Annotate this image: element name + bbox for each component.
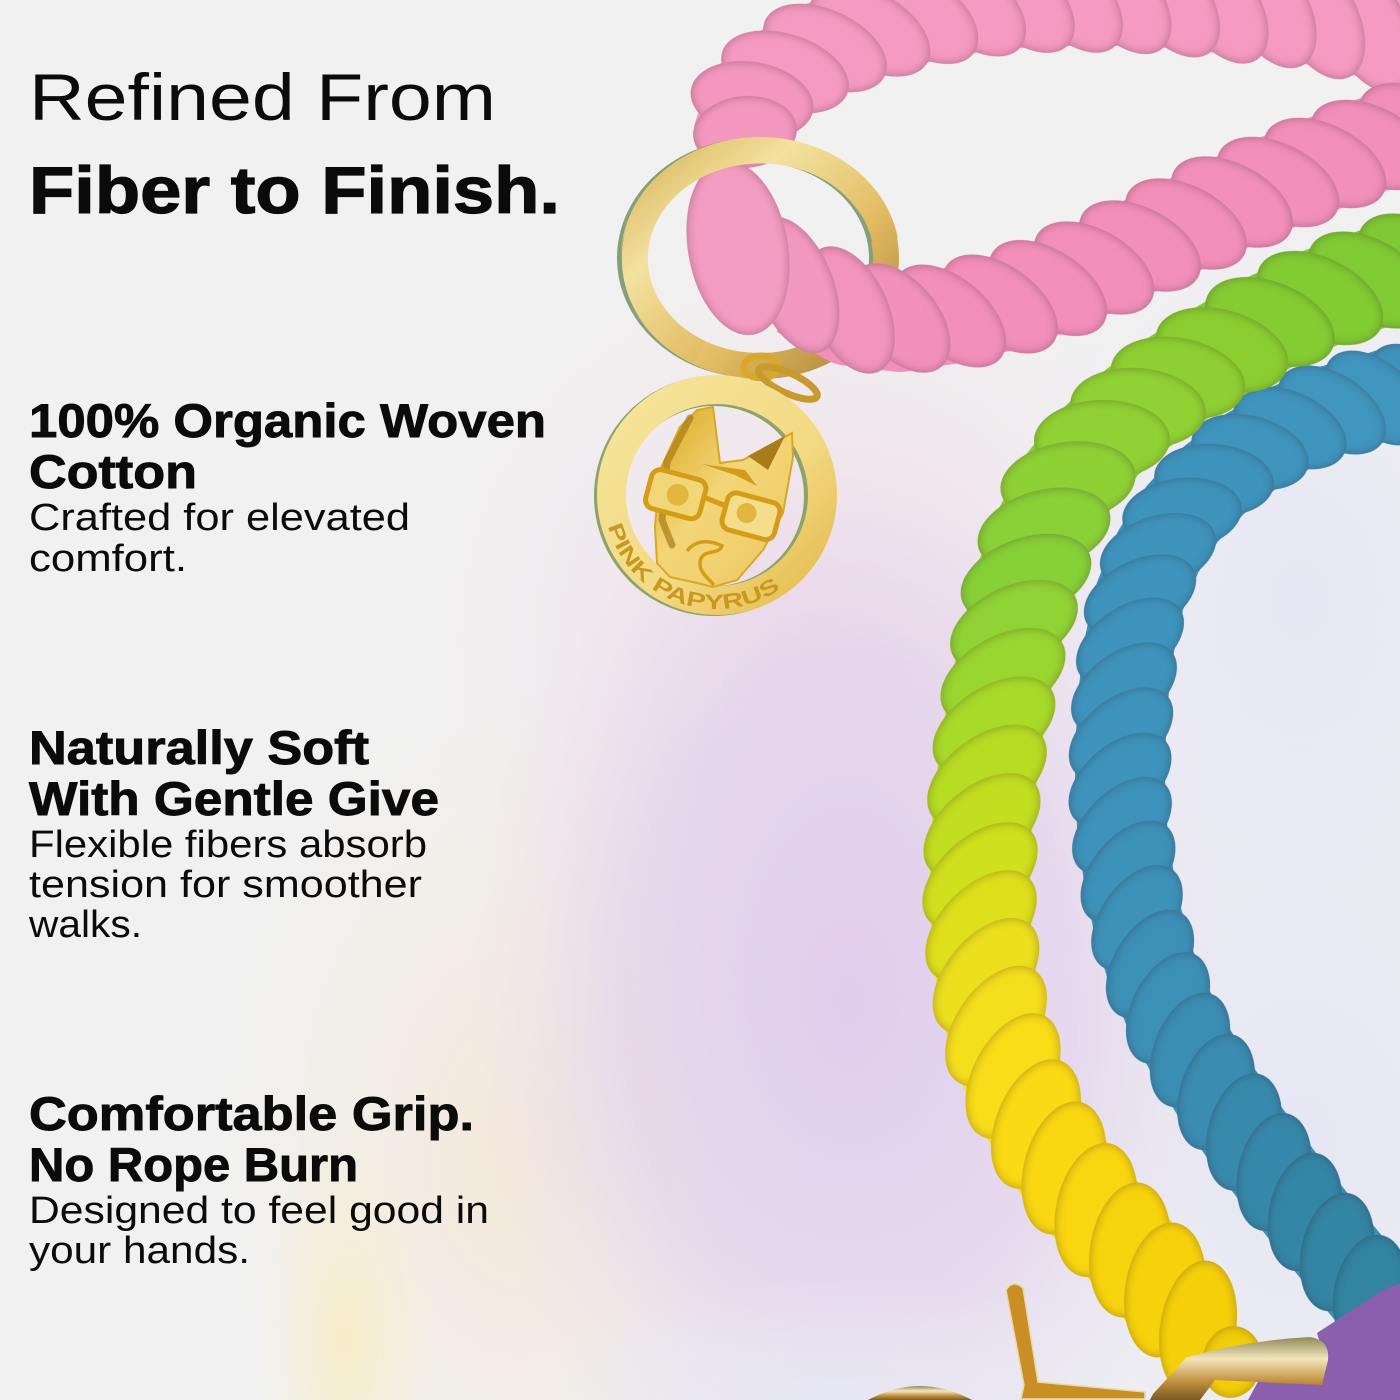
- text block: comfortable grip: Designed to feel good in: [29, 1190, 489, 1232]
- purple webbing: [1248, 1283, 1400, 1400]
- text block: naturally soft: walks.: [28, 904, 142, 946]
- tag engraved text: PINK PAPYRUS: [608, 523, 778, 610]
- buckle pin: [1006, 1284, 1145, 1399]
- rope: green to yellow strand: [902, 193, 1400, 1400]
- text block: comfortable grip: [29, 1087, 489, 1272]
- text block: naturally soft: With Gentle Give: [29, 772, 439, 825]
- text block: organic cotton: comfort.: [29, 538, 187, 580]
- gold buckle hardware: [868, 1284, 1328, 1400]
- tag bail ring: [744, 356, 821, 406]
- title: Fiber to Finish.: [29, 153, 560, 227]
- title: [29, 60, 560, 227]
- buckle dome: [868, 1386, 972, 1400]
- rope: pink lower strand and knot: [673, 64, 1400, 391]
- text block: comfortable grip: your hands.: [29, 1230, 250, 1272]
- tag disc: [609, 390, 822, 601]
- gold ring front: [624, 150, 885, 355]
- rope: pink upper strand: [684, 0, 1400, 172]
- text block: organic cotton: [29, 394, 546, 580]
- text block: naturally soft: [28, 721, 439, 946]
- title: Refined From: [29, 60, 496, 134]
- text block: comfortable grip: No Rope Burn: [29, 1138, 358, 1191]
- text block: naturally soft: tension for smoother: [29, 864, 422, 906]
- text block: organic cotton: Cotton: [29, 445, 197, 498]
- text block: naturally soft: Naturally Soft: [29, 721, 369, 774]
- buckle bar: [1150, 1337, 1328, 1400]
- text block: comfortable grip: Comfortable Grip.: [29, 1087, 474, 1140]
- text block: naturally soft: Flexible fibers absorb: [29, 824, 427, 866]
- dog head: [643, 407, 793, 587]
- text block: organic cotton: Crafted for elevated: [29, 497, 410, 539]
- rope: blue strand: [1051, 325, 1400, 1356]
- gold ring back: [629, 150, 886, 366]
- text block: organic cotton: 100% Organic Woven: [29, 394, 546, 447]
- gold tag: pink papyrus dog: [594, 352, 837, 616]
